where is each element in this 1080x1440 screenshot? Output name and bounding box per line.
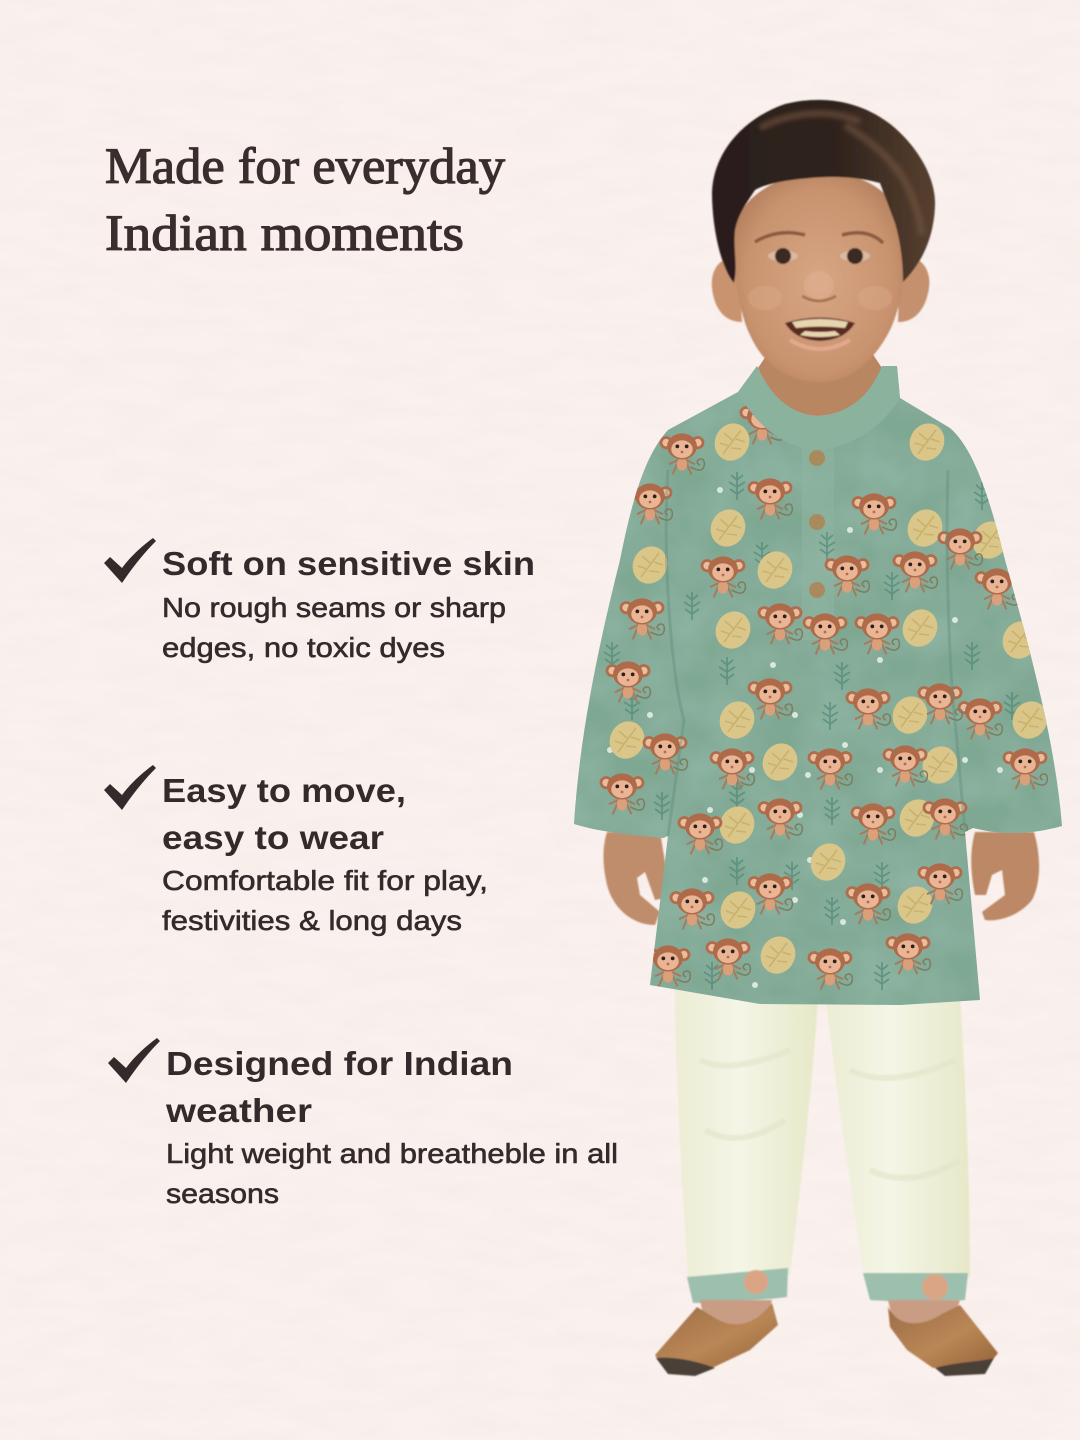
benefit text: Easy to move, xyxy=(162,772,406,809)
smile xyxy=(785,318,855,349)
hair xyxy=(712,100,935,283)
face xyxy=(734,172,905,382)
child figure wearing monkey print kurta xyxy=(560,100,1070,1376)
benefit: soft on sensitive skin xyxy=(104,538,535,663)
nose xyxy=(802,271,836,301)
brows xyxy=(755,233,883,243)
icon: check mark xyxy=(104,538,156,583)
icon: check mark xyxy=(108,1038,160,1083)
eyes xyxy=(768,248,870,264)
icon: check mark xyxy=(104,765,156,810)
title: Indian moments xyxy=(105,206,464,262)
title xyxy=(105,139,506,262)
head xyxy=(712,100,935,382)
pants xyxy=(675,990,970,1303)
benefit text xyxy=(162,545,535,663)
benefit text xyxy=(162,772,488,936)
benefit: designed for Indian weather xyxy=(108,1038,618,1209)
leaves xyxy=(604,418,1053,979)
neck xyxy=(758,350,882,416)
benefit text: Comfortable fit for play, xyxy=(162,865,488,896)
benefit text: festivities & long days xyxy=(162,905,462,936)
tiny white dots xyxy=(607,487,1003,988)
title: Made for everyday xyxy=(105,139,506,195)
benefit text: easy to wear xyxy=(162,819,384,856)
ears xyxy=(712,258,742,322)
feet and shoes xyxy=(655,1300,998,1376)
benefit text: weather xyxy=(165,1092,312,1129)
benefit: easy to move xyxy=(104,765,488,936)
benefit text: Light weight and breatheble in all xyxy=(166,1138,618,1169)
collar xyxy=(738,366,900,450)
benefit text: No rough seams or sharp xyxy=(162,592,506,623)
hair highlights xyxy=(760,113,922,235)
buttons xyxy=(809,450,825,598)
kurta xyxy=(560,360,1070,1010)
benefit text: Soft on sensitive skin xyxy=(162,545,535,582)
cheeks xyxy=(748,286,782,310)
benefit text: seasons xyxy=(166,1178,279,1209)
placket xyxy=(802,445,834,640)
benefit text: edges, no toxic dyes xyxy=(162,632,445,663)
cuffs xyxy=(687,1268,788,1303)
benefit text: Designed for Indian xyxy=(166,1045,513,1082)
sleeve seams xyxy=(666,470,965,836)
benefit text xyxy=(165,1045,618,1209)
hands xyxy=(603,832,1039,925)
monkeys xyxy=(600,403,1047,989)
small foliage xyxy=(604,472,1020,990)
